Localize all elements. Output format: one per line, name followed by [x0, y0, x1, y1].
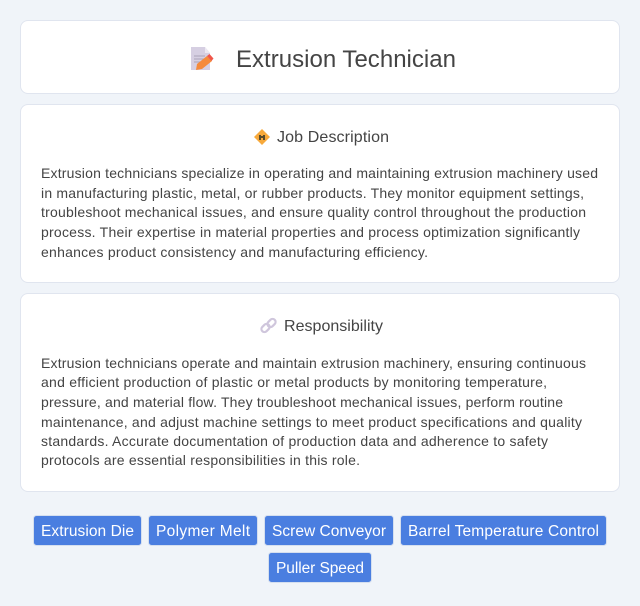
heading: responsibility: Responsibility: [284, 318, 383, 335]
tag: Extrusion Die: Extrusion Die: [41, 523, 134, 540]
panel: responsibility: [20, 293, 620, 492]
text: responsibility body: [41, 355, 586, 468]
tag: Polymer Melt: Polymer Melt: [156, 523, 251, 540]
tag: Barrel Temperature Control: [400, 516, 606, 546]
tag: Extrusion Die: [34, 516, 142, 546]
icon: diamond sign: [254, 129, 270, 145]
text: responsibility body: standards. Accurate documentation of production data and adherence to safety: [41, 433, 548, 449]
text: responsibility body: pressure, and material flow. They troubleshoot mechanical issues, perform routine: [41, 394, 563, 410]
text: responsibility body: Extrusion technicians operate and maintain extrusion machinery, ensuring continuous: [41, 355, 586, 371]
text: job description body: Extrusion technicians specialize in operating and maintaining extrusion machinery used: [41, 165, 598, 181]
heading: job description: Job Description: [277, 129, 389, 146]
text: responsibility body: protocols are essential responsibilities in this role.: [41, 452, 360, 468]
text: job description body: in manufacturing plastic, metal, or rubber products. They monitor equipment settings,: [41, 185, 584, 201]
text: responsibility body: and efficient production of plastic or metal products by monitoring temperature,: [41, 374, 547, 390]
text: job description body: process. Their expertise in material properties and process optimization significantly: [41, 224, 580, 240]
tag: Screw Conveyor: Screw Conveyor: [272, 523, 386, 540]
tag: Puller Speed: Puller Speed: [276, 560, 364, 577]
text: job description body: troubleshoot mechanical issues, and ensure quality control throughout the production: [41, 204, 586, 220]
icon: document with pencil: [191, 47, 214, 70]
tag: Barrel Temperature Control: Barrel Temperature Control: [408, 523, 599, 540]
icon: chain link: [260, 318, 277, 333]
tag: Puller Speed: [268, 552, 372, 582]
heading: title: Extrusion Technician: [236, 46, 456, 73]
panel: title: [20, 20, 620, 94]
text: responsibility body: maintenance, and adjust machine settings to meet product specifications and quality: [41, 414, 582, 430]
text: job description body: enhances product consistency and manufacturing efficiency.: [41, 244, 428, 260]
text: job description body: [41, 165, 598, 260]
tag: Screw Conveyor: [264, 516, 394, 546]
panel: job description: [20, 104, 620, 283]
tag: Polymer Melt: [148, 516, 258, 546]
